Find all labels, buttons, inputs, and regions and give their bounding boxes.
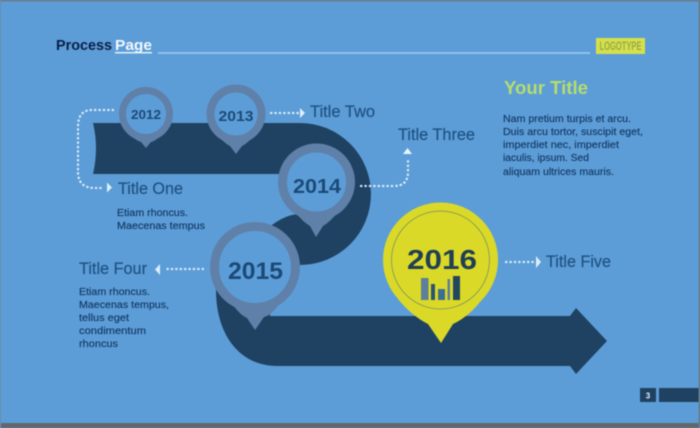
dotted connector: 2014 to Title Three bbox=[361, 148, 412, 186]
logotype badge: LOGOTYPE bbox=[600, 41, 642, 53]
label: Title Five: Title Five bbox=[546, 253, 611, 271]
label: Title Two: Title Two bbox=[310, 103, 375, 121]
dotted connector: 2016 to Title Five bbox=[506, 256, 541, 268]
pin: 2015: 2015 bbox=[228, 258, 283, 285]
page number bbox=[640, 388, 656, 402]
label: Title Four: Title Four bbox=[79, 260, 147, 278]
heading: Process Page bbox=[56, 37, 152, 54]
text: Your Title body: Nam pretium turpis et arcu. bbox=[503, 113, 631, 125]
text: Title One body: Etiam rhoncus. bbox=[117, 207, 188, 219]
page number: 3 bbox=[646, 392, 651, 400]
text: Title Four body: Etiam rhoncus. bbox=[79, 286, 150, 298]
pin: 2016 bbox=[383, 202, 498, 343]
logotype badge bbox=[596, 38, 645, 54]
pin: 2014 bbox=[282, 148, 350, 237]
text: Title Four body: tellus eget bbox=[79, 312, 129, 324]
footer bar bbox=[659, 388, 698, 402]
pin: 2015 bbox=[214, 226, 296, 330]
text: Title Four body: condimentum bbox=[79, 325, 146, 337]
label: Title Three: Title Three bbox=[398, 126, 475, 144]
pin: 2013: 2013 bbox=[218, 108, 254, 125]
dotted connector: 2013 to Title Two bbox=[271, 108, 305, 118]
text: Your Title body: imperdiet nec, imperdiet bbox=[503, 139, 619, 151]
text: Your Title body: aliquam ultrices mauris. bbox=[503, 166, 614, 178]
pin: 2016: 2016 bbox=[407, 244, 477, 275]
text: Title Four body: rhoncus bbox=[79, 338, 118, 350]
ribbon arrow bbox=[93, 123, 607, 374]
text: Your Title body: Duis arcu tortor, suscipit eget, bbox=[503, 126, 643, 138]
text: Your Title body: iaculis, ipsum. Sed bbox=[503, 152, 589, 164]
text: Title One body: Maecenas tempus bbox=[117, 220, 205, 232]
dotted connector: 2015 to Title Four bbox=[155, 264, 203, 275]
pin: 2014: 2014 bbox=[293, 175, 342, 198]
pin: 2012 bbox=[122, 90, 170, 148]
text: Title Four body: Maecenas tempus, bbox=[79, 299, 169, 311]
label: Title One: Title One bbox=[118, 180, 183, 198]
heading: Your Title: Your Title bbox=[504, 78, 588, 98]
pin: 2013 bbox=[210, 88, 262, 154]
dotted connector: 2012 to Title One bbox=[78, 110, 113, 192]
pin: 2012: 2012 bbox=[131, 107, 161, 122]
icon: bar chart bbox=[421, 276, 460, 300]
heading: Process Page: Process bbox=[56, 37, 112, 54]
heading: Process Page: Page bbox=[115, 37, 152, 54]
